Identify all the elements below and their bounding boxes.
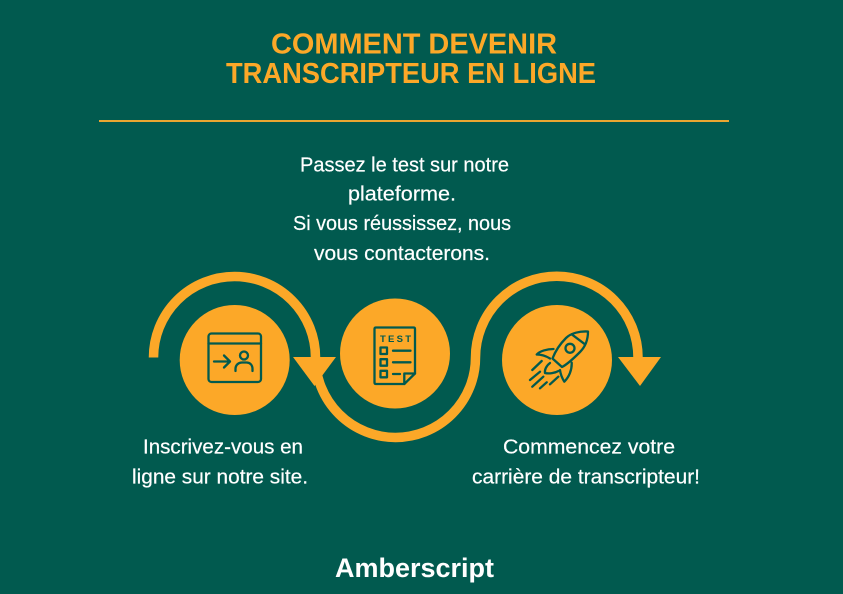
text: step 3 description: Commencez votre: [503, 435, 675, 458]
step 3 circle with rocket icon: [502, 305, 612, 415]
title: COMMENT DEVENIR: [271, 28, 557, 60]
icon: test sheet: TEST: [380, 334, 411, 345]
arrow: winding path from left to middle: [154, 276, 336, 386]
text: step 1 description: Inscrivez-vous en: [143, 435, 303, 458]
logo: Amberscript: Amberscript: [335, 553, 494, 583]
text: step 3 description: carrière de transcripteur!: [472, 465, 700, 488]
title: [226, 28, 596, 90]
icon: browser window with person: [208, 334, 261, 382]
step 1 circle with signup icon: [180, 305, 290, 415]
title: TRANSCRIPTEUR EN LIGNE: [226, 58, 596, 90]
text: step 2 description: vous contacterons.: [314, 242, 490, 265]
step 2 circle with test icon: [340, 298, 450, 408]
icon: rocket: [530, 331, 588, 388]
text: step 1 description: ligne sur notre site.: [132, 465, 308, 488]
text: step 1 description: [132, 435, 308, 488]
text: step 2 description: Passez le test sur notre: [300, 154, 509, 177]
text: step 2 description: Si vous réussissez, nous: [293, 212, 511, 235]
text: step 3 description: [472, 435, 700, 488]
text: step 2 description: [293, 154, 511, 265]
arrow: winding path from middle to right: [316, 276, 661, 437]
text: step 2 description: plateforme.: [348, 183, 456, 206]
